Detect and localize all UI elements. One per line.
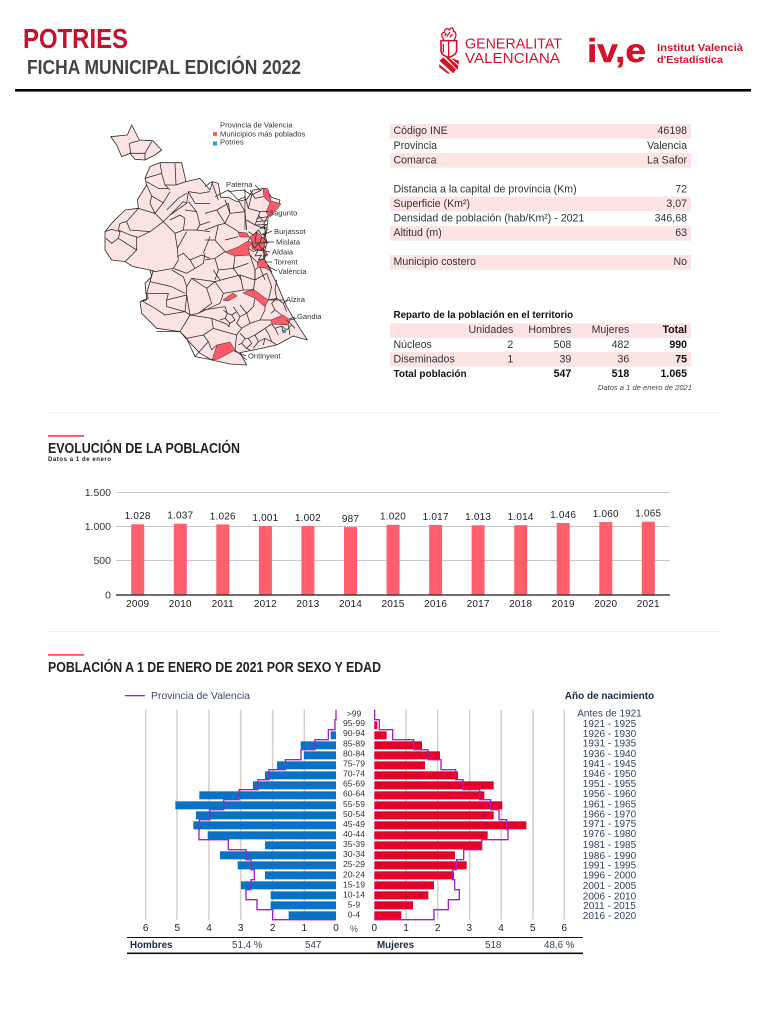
- birth year labels: 1921 - 1925: [583, 719, 637, 730]
- map: municipal borders west: [105, 163, 210, 273]
- chart value labels: 1.001: [252, 513, 279, 524]
- chart grid and y axis: 1.000: [85, 521, 111, 533]
- table: municipal data: La Safor: [647, 154, 687, 166]
- pyramid age labels: 70-74: [343, 768, 365, 778]
- chart year labels: 2009: [126, 599, 149, 610]
- chart value labels: 1.046: [550, 510, 576, 521]
- heading: population evolution: [48, 435, 240, 463]
- birth year labels: 1941 - 1945: [583, 759, 637, 770]
- table: municipal data: [390, 124, 691, 270]
- pyramid: women: [374, 710, 564, 920]
- heading: population evolution: Datos a 1 de enero: [48, 457, 111, 463]
- pyramid age labels: [343, 708, 365, 920]
- pyramid x axis: 4: [498, 923, 504, 934]
- chart value labels: 1.013: [465, 512, 491, 523]
- table: population distribution: 482: [612, 339, 629, 351]
- map place labels: Alzira: [286, 295, 306, 304]
- birth year labels: 1981 - 1985: [583, 840, 637, 851]
- map place labels: Mislata: [276, 238, 301, 246]
- chart year labels: 2016: [424, 599, 447, 610]
- map place labels: València: [278, 267, 307, 276]
- birth year labels: 1986 - 1990: [583, 851, 637, 862]
- heading: population evolution: EVOLUCIÓN DE LA POBLACIÓN: [48, 439, 240, 457]
- map place labels: Paterna: [226, 180, 253, 189]
- women province line: [374, 710, 508, 920]
- table: municipal data: Altitud (m): [394, 227, 442, 239]
- pyramid totals row: [127, 937, 583, 954]
- birth year labels: 1936 - 1940: [583, 749, 637, 760]
- women bars: [374, 721, 526, 919]
- chart year labels: 2018: [509, 599, 532, 610]
- table note: Datos a 1 de enero de 2021: [598, 383, 692, 392]
- map place labels: [226, 180, 322, 360]
- table: population distribution: 36: [618, 354, 629, 366]
- chart year labels: 2014: [339, 599, 362, 610]
- pyramid age labels: 40-44: [343, 829, 365, 839]
- birth year labels: 1991 - 1995: [583, 860, 637, 872]
- logo: IVE Institut Valencia d'Estadistica: Institut Valencià: [657, 43, 743, 54]
- logo: Generalitat Valenciana: VALENCIANA: [465, 50, 560, 67]
- map: province of Valencia: [105, 125, 307, 365]
- table: population distribution: Hombres: [528, 324, 571, 336]
- header title: FICHA MUNICIPAL EDICIÓN 2022: [27, 55, 301, 79]
- birth year labels: 1961 - 1965: [583, 800, 637, 810]
- map legend: Municipios más poblados: [220, 130, 305, 138]
- map place labels: Sagunto: [269, 208, 297, 218]
- chart grid and y axis: [85, 487, 670, 602]
- pyramid x axis: 0: [333, 923, 339, 934]
- chart value labels: 1.037: [167, 510, 194, 522]
- pyramid age labels: 15-19: [343, 880, 365, 890]
- pyramid age labels: 75-79: [343, 758, 365, 768]
- map: highlighted municipalities: [212, 188, 290, 360]
- header rule: [15, 89, 751, 92]
- pyramid age labels: 85-89: [343, 738, 365, 748]
- chart year labels: 2019: [552, 599, 575, 610]
- table: population distribution: 75: [675, 354, 687, 366]
- header title: POTRIES: [23, 23, 128, 54]
- table: population distribution: 1: [507, 354, 513, 366]
- table: municipal data: Valencia: [647, 140, 687, 152]
- birth year labels: 1966 - 1970: [583, 810, 637, 820]
- pyramid age labels: 50-54: [343, 809, 365, 819]
- pyramid age labels: 60-64: [343, 788, 365, 798]
- pyramid x axis: 5: [530, 923, 536, 934]
- chart value labels: [125, 508, 662, 525]
- map: leader lines: [234, 189, 295, 356]
- birth year labels: 1971 - 1975: [583, 819, 637, 830]
- map place labels: Aldaia: [272, 248, 294, 256]
- table: population distribution: 508: [554, 339, 571, 351]
- pyramid x axis: 2: [270, 923, 276, 934]
- pyramid x axis: 6: [562, 923, 568, 934]
- pyramid age labels: 30-34: [343, 849, 365, 859]
- legend: Potries swatch: [213, 142, 217, 146]
- chart bars: [131, 522, 655, 595]
- birth year labels: 1996 - 2000: [583, 870, 637, 882]
- table: municipal data: 63: [675, 227, 687, 239]
- birth year labels: 2006 - 2010: [583, 892, 637, 902]
- men bars: [175, 731, 336, 919]
- pyramid x axis: %: [350, 924, 358, 934]
- chart value labels: 1.020: [380, 512, 406, 522]
- table: municipal data: Municipio costero: [394, 256, 476, 268]
- map place labels: Gandia: [297, 312, 322, 321]
- pyramid age labels: >99: [347, 708, 362, 718]
- table: population distribution: Núcleos: [394, 339, 432, 351]
- table: municipal data: No: [673, 256, 687, 268]
- pyramid age labels: 90-94: [343, 728, 365, 738]
- legend: province line: Provincia de Valencia: [151, 690, 250, 702]
- pyramid x axis: 6: [143, 923, 149, 934]
- chart grid and y axis: 0: [105, 590, 111, 602]
- chart value labels: 1.065: [635, 508, 662, 520]
- pyramid age labels: 95-99: [343, 718, 365, 728]
- table: municipal data: Provincia: [394, 140, 437, 152]
- pyramid x axis: [143, 923, 568, 934]
- chart year labels: 2017: [467, 599, 490, 610]
- birth year labels: [565, 691, 654, 922]
- chart grid and y axis: 500: [93, 555, 111, 567]
- chart value labels: 1.014: [508, 512, 534, 523]
- table: municipal data: Distancia a la capital de provincia (Km): [394, 184, 577, 196]
- map: Potries marker: [283, 330, 286, 333]
- pyramid x axis: 4: [206, 923, 212, 934]
- pyramid totals row: Hombres: [130, 940, 173, 951]
- map: municipal borders north-east: [205, 182, 272, 280]
- map place labels: Burjassot: [274, 227, 307, 236]
- header title: [23, 23, 301, 79]
- map base shapes: [105, 125, 307, 365]
- chart value labels: 1.026: [210, 512, 236, 522]
- table: municipal data: Comarca: [394, 154, 437, 166]
- birth year labels: 1951 - 1955: [583, 779, 637, 790]
- men province line: [199, 710, 336, 920]
- legend: most populated swatch: [213, 132, 217, 136]
- birth year labels: 2011 - 2015: [583, 901, 636, 912]
- logo: Generalitat Valenciana: [439, 28, 562, 74]
- chart year labels: 2015: [381, 599, 405, 610]
- map: municipal borders south: [142, 270, 297, 360]
- logo: IVE Institut Valencia d'Estadistica: [587, 32, 743, 69]
- table: population distribution: Mujeres: [592, 324, 629, 336]
- logo: Generalitat Valenciana: GENERALITAT: [465, 36, 562, 52]
- chart value labels: 1.060: [593, 509, 619, 520]
- table: population distribution: 518: [612, 368, 629, 380]
- chart year labels: [126, 599, 660, 610]
- chart value labels: 987: [342, 514, 359, 525]
- pyramid x axis: 1: [403, 923, 409, 934]
- pyramid x axis: 3: [467, 923, 473, 934]
- map place labels: Torrent: [274, 258, 299, 266]
- table: municipal data: 3,07: [666, 198, 687, 210]
- pyramid age labels: 5-9: [348, 900, 360, 910]
- chart year labels: 2012: [254, 599, 277, 610]
- chart year labels: 2011: [212, 599, 234, 610]
- pyramid age labels: 65-69: [343, 778, 365, 788]
- birth year labels: Antes de 1921: [577, 708, 642, 720]
- table: population distribution: 1.065: [660, 368, 687, 380]
- birth year labels: 1976 - 1980: [583, 829, 637, 840]
- chart value labels: 1.002: [295, 513, 321, 524]
- map legend: Provincia de Valencia: [220, 120, 293, 130]
- table heading: Reparto de la población en el territorio: [394, 310, 573, 321]
- table: population distribution: 547: [554, 368, 571, 380]
- bar chart: population by year: [85, 487, 670, 610]
- birth year labels: 1946 - 1950: [583, 769, 637, 780]
- map place labels: Ontinyent: [248, 352, 281, 360]
- chart year labels: 2010: [169, 599, 192, 610]
- pyramid x axis: 1: [302, 923, 308, 934]
- pyramid x axis: 2: [435, 923, 441, 934]
- logo: IVE Institut Valencia d'Estadistica: iv,e: [587, 32, 646, 69]
- birth year heading: Año de nacimiento: [565, 691, 654, 702]
- pyramid age labels: 55-59: [343, 799, 365, 809]
- chart year labels: 2013: [296, 599, 320, 610]
- chart year labels: 2020: [594, 599, 618, 610]
- pyramid totals row: 547: [305, 940, 321, 951]
- table: municipal data: Código INE: [394, 125, 448, 137]
- table: population distribution: Diseminados: [394, 354, 455, 366]
- pyramid: men: [146, 710, 336, 920]
- table: population distribution: 990: [669, 339, 687, 351]
- birth year labels: 1956 - 1960: [583, 789, 637, 800]
- pyramid x axis: 3: [238, 923, 244, 934]
- map legend: Potries: [220, 138, 244, 146]
- pyramid age labels: 80-84: [343, 748, 365, 758]
- pyramid age labels: 0-4: [348, 910, 360, 920]
- chart grid and y axis: 1.500: [85, 487, 111, 499]
- pyramid totals row: 51,4 %: [232, 940, 263, 951]
- birth year labels: 1931 - 1935: [583, 738, 637, 750]
- pyramid totals row: Mujeres: [377, 940, 415, 951]
- pyramid age labels: 35-39: [343, 839, 365, 849]
- table: municipal data: 72: [675, 184, 687, 196]
- logo: IVE Institut Valencia d'Estadistica: d'Estadística: [657, 55, 723, 66]
- chart value labels: 1.017: [423, 512, 449, 523]
- chart value labels: 1.028: [125, 511, 151, 522]
- table: municipal data: Densidad de población (hab/Km²) - 2021: [394, 212, 584, 224]
- pyramid x axis: 0: [372, 923, 378, 934]
- pyramid x axis: 5: [175, 923, 181, 934]
- pyramid totals row: 48,6 %: [544, 940, 575, 951]
- pyramid age labels: 25-29: [343, 859, 365, 869]
- table: population distribution: 39: [560, 354, 571, 366]
- icon: crest: [439, 28, 459, 74]
- chart year labels: 2021: [637, 599, 660, 610]
- table: population distribution: Total población: [394, 369, 467, 380]
- pyramid age labels: 45-49: [343, 819, 365, 829]
- birth year labels: 2016 - 2020: [583, 911, 637, 922]
- pyramid age labels: 20-24: [343, 870, 365, 880]
- table: municipal data: Superficie (Km²): [394, 198, 470, 210]
- table: population distribution: Total: [662, 324, 687, 336]
- birth year labels: 1926 - 1930: [583, 729, 637, 740]
- pyramid age labels: 10-14: [343, 890, 365, 900]
- table: population distribution: [390, 310, 692, 392]
- table: population distribution: Unidades: [469, 324, 513, 336]
- table: population distribution: 2: [507, 339, 513, 351]
- heading: population pyramid: POBLACIÓN A 1 DE ENERO DE 2021 POR SEXO Y EDAD: [48, 658, 381, 676]
- birth year labels: 2001 - 2005: [583, 881, 637, 892]
- pyramid totals row: 518: [485, 940, 502, 951]
- table: municipal data: 46198: [658, 125, 687, 137]
- table: municipal data: 346,68: [655, 212, 687, 224]
- map legend: [213, 120, 305, 146]
